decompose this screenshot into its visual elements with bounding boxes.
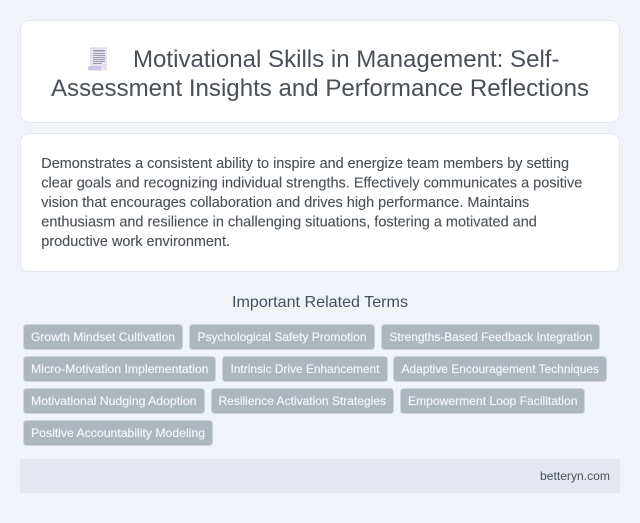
icon: document scroll [88,48,107,70]
description text: productive work environment. [41,234,230,250]
tag: micro-motivation implementation: Micro-Motivation Implementation [31,362,208,376]
heading: important related terms: Important Related Terms [232,294,408,311]
tag: resilience activation strategies [212,388,394,414]
tag: motivational nudging adoption [24,388,204,414]
tag list [24,324,606,446]
tag: growth mindset cultivation: Growth Mindset Cultivation [31,330,175,344]
description text: Demonstrates a consistent ability to inspire and energize team members by setting [41,156,569,172]
tag: motivational nudging adoption: Motivational Nudging Adoption [31,394,196,408]
tag: intrinsic drive enhancement: Intrinsic Drive Enhancement [230,362,380,376]
tag: adaptive encouragement techniques: Adaptive Encouragement Techniques [402,362,599,376]
tag: growth mindset cultivation [24,324,182,350]
description text [41,156,582,250]
description text: vision that encourages collaboration and drives high performance. Maintains [41,195,529,211]
panel: description card [20,134,620,272]
tag: psychological safety promotion: Psychological Safety Promotion [198,330,366,344]
title line 1: Motivational Skills in Management: Self- [133,46,560,73]
tag: intrinsic drive enhancement [222,356,388,382]
footer bar [20,459,620,493]
tag: positive accountability modeling [24,420,212,446]
tag: strengths-based feedback integration [382,324,600,350]
tag: micro-motivation implementation [24,356,216,382]
description text: enthusiasm and resilience in challenging situations, fostering a motivated and [41,214,537,230]
title line 2: Assessment Insights and Performance Reflections [51,75,589,102]
tag: empowerment loop facilitation: Empowerment Loop Facilitation [408,394,578,408]
tag: resilience activation strategies: Resilience Activation Strategies [218,394,386,408]
footer source text: betteryn.com [540,469,610,483]
tag: strengths-based feedback integration: Strengths-Based Feedback Integration [390,330,592,344]
tag: adaptive encouragement techniques [394,356,606,382]
description text: clear goals and recognizing individual strengths. Effectively communicates a positive [41,176,582,192]
panel: title card [20,20,620,122]
tag: psychological safety promotion [190,324,374,350]
tag: empowerment loop facilitation [400,388,584,414]
tag: positive accountability modeling: Positive Accountability Modeling [31,426,205,440]
